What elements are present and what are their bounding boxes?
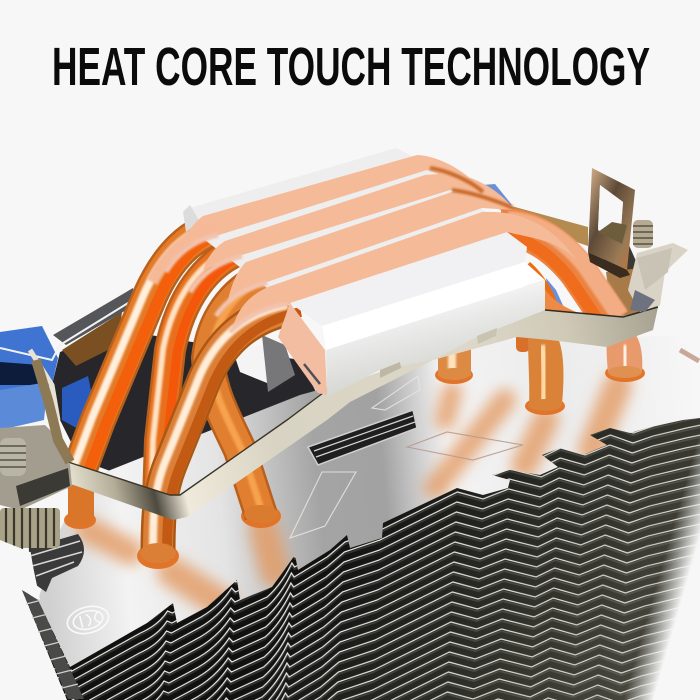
slot in plate [308,410,417,465]
knurled standoff and back band of right bracket [490,205,662,318]
heat pipe 2 [151,247,251,503]
small rear pipe [516,330,530,352]
cpu cooler illustration [0,148,700,700]
rear heat pipe stubs [435,262,645,415]
flat copper strip 3 [228,192,513,300]
left clip and screw [0,350,72,600]
pipe into socket E [525,338,565,415]
fan and frame behind the heat pipes [0,288,320,500]
heat pipe sockets on plate [64,504,281,569]
cap front facet [326,280,545,397]
white aluminium cap [278,232,545,397]
under pipes at right side [524,262,560,312]
shaded bends at right [430,168,513,208]
right bracket wing [628,243,688,312]
heatsink fins [0,410,700,700]
screw thread [0,438,26,476]
right bend of heat pipe 4 [492,220,620,329]
screw [633,220,653,248]
white base under strips [183,148,505,306]
right edge fade [600,400,700,700]
heat pipe 3 [208,276,278,523]
small clip at far right [680,350,699,361]
copper reflections on plate [88,385,618,604]
pipe tip highlights [166,235,288,332]
flat copper strip 1 [183,155,483,246]
square clip frame [588,168,635,270]
copper heat spreader block [152,148,578,332]
blue fan piece behind right bracket [482,184,566,312]
right bracket with square clip [588,168,688,312]
cap top facet [290,232,527,326]
knurled standoff [0,508,60,552]
heat pipe 4 front [140,305,301,563]
clip plate [16,468,70,506]
heat pipe 1 [66,222,236,525]
flat copper strip 4 [232,212,578,330]
cap notches [380,362,401,378]
embossed plate windows [290,376,523,538]
flat copper strip 2 [203,173,513,270]
cap sloped facet [322,262,545,350]
pipe into socket F [605,335,645,382]
fin side strip at left edge [22,590,84,699]
silver bracket behind screw [0,425,72,510]
shoulder of left pipe 1 [152,228,218,282]
foil end of cap [278,303,327,395]
embossed logo [64,602,112,638]
left bracket bright arms [30,350,58,420]
pipe into socket D [435,345,473,384]
round cut-out with fins at lower left [30,534,84,592]
aluminium top plate [38,335,700,700]
mounting bar [68,307,658,520]
